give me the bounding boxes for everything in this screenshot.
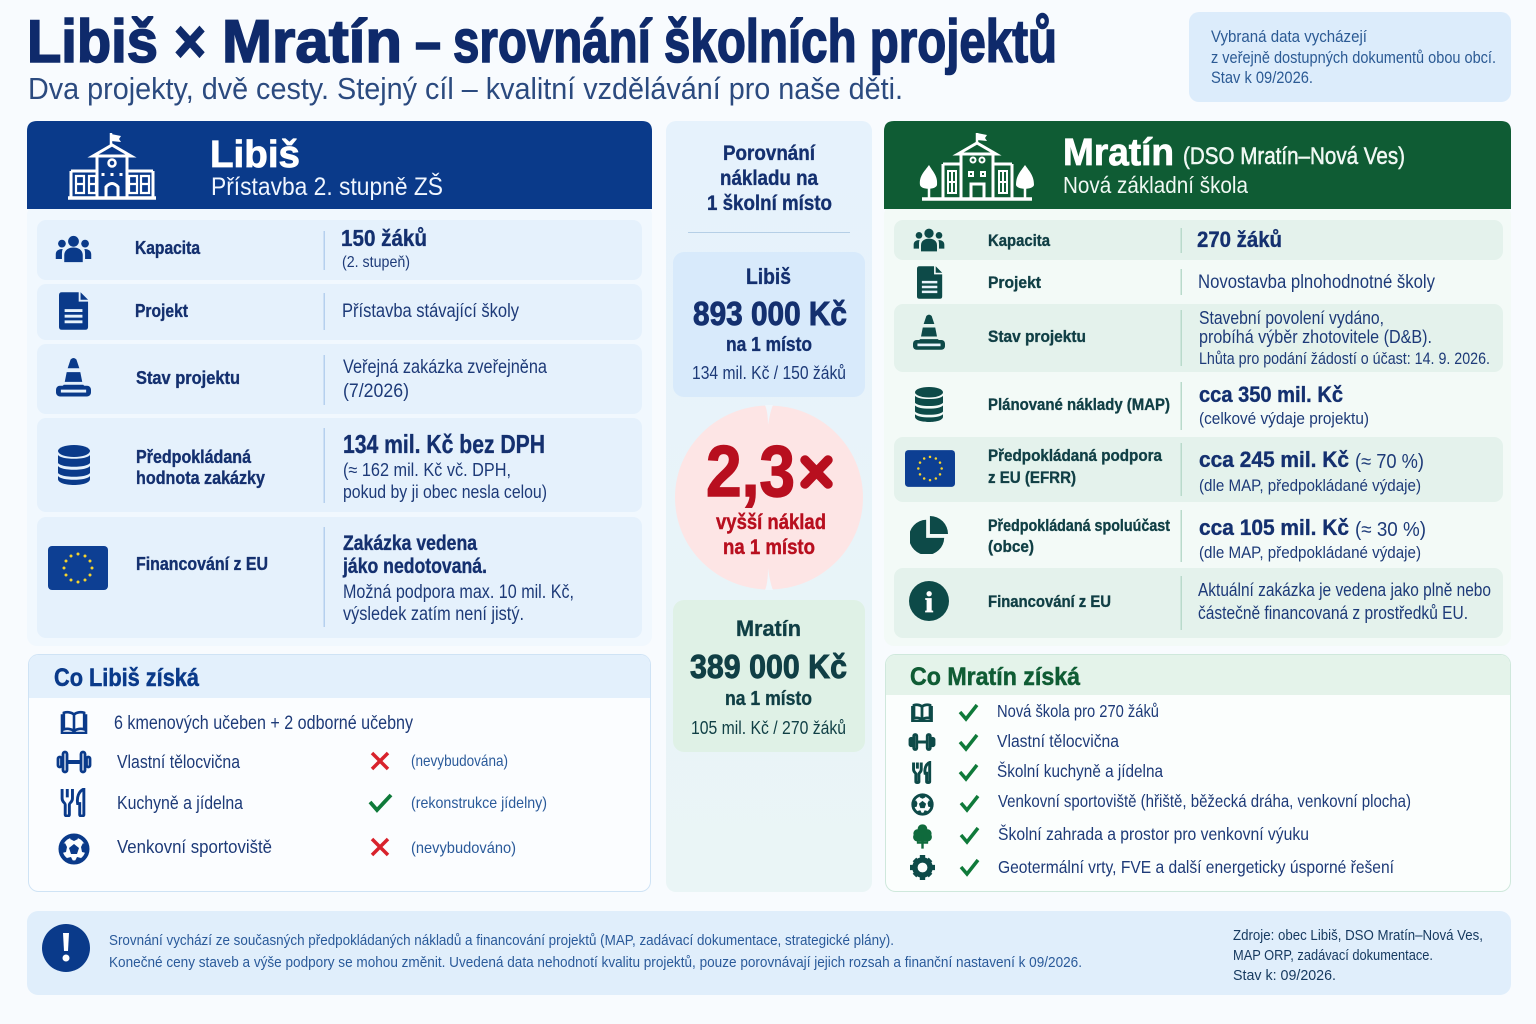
card: Mratín cost: Mratín <box>736 616 801 641</box>
row: Financování z EU: Zakázka vedena <box>343 532 477 555</box>
footer note: Srovnání vychází ze současných předpokládaných nákladů a financování projektů (MAP, zadávací dokumentace, strategické plány). <box>109 932 894 949</box>
panel: Co Libiš získá <box>28 654 650 892</box>
Libiš header <box>27 121 652 209</box>
item: kuchyně <box>914 760 1163 782</box>
comparison heading <box>707 142 832 215</box>
row: Kapacita: Kapacita <box>988 231 1050 250</box>
row: Projekt: Projekt <box>135 301 188 321</box>
card: Libiš cost: na 1 místo <box>726 334 812 356</box>
icon: school with trees <box>920 133 1034 199</box>
item: tělocvična: Vlastní tělocvična <box>117 752 241 772</box>
Mratín header <box>884 121 1511 209</box>
item: kuchyně: (rekonstrukce jídelny) <box>411 795 547 812</box>
title: – <box>415 8 441 75</box>
row: Předpokládaná podpora: (≈ 70 %) <box>1355 451 1424 473</box>
row: Kapacita <box>37 220 642 280</box>
row: Plánované náklady <box>915 382 1369 430</box>
item: učebny: 6 kmenových učeben + 2 odborné učebny <box>114 713 413 734</box>
item: kuchyně: Kuchyně a jídelna <box>117 793 244 813</box>
row: Předpokládaná hodnota zakázky: hodnota zakázky <box>136 468 265 488</box>
panel: Co Libiš získá: Co Libiš získá <box>54 664 199 692</box>
row: Stav projektu: probíhá výběr zhotovitele (D&B). <box>1199 327 1432 347</box>
comparison heading: 1 školní místo <box>707 192 832 215</box>
row: Financování z EU: Financování z EU <box>988 592 1111 611</box>
callout: 2,3×: vyšší náklad <box>716 511 826 534</box>
row: Stav projektu <box>37 344 642 414</box>
row: Stav projektu: (7/2026) <box>343 381 409 402</box>
Libiš header: Přístavba 2. stupně ZŠ <box>211 172 443 201</box>
card: Mratín cost: na 1 místo <box>725 688 812 710</box>
Mratín header: Mratín <box>1063 132 1174 174</box>
item: sportoviště <box>60 835 516 863</box>
item: energie: Geotermální vrty, FVE a další energeticky úsporné řešení <box>998 857 1394 877</box>
item: energie <box>910 855 1394 880</box>
item: tělocvična <box>910 731 1119 751</box>
card: Mratín cost: 105 mil. Kč / 270 žáků <box>691 718 846 738</box>
item: tělocvična: Vlastní tělocvična <box>997 731 1119 751</box>
row: Stav projektu: Stav projektu <box>988 327 1086 346</box>
card: Libiš cost: 134 mil. Kč / 150 žáků <box>692 363 846 383</box>
row: Předpokládaná podpora: (dle MAP, předpokládané výdaje) <box>1199 476 1421 495</box>
row: Financování z EU: Možná podpora max. 10 mil. Kč, <box>343 582 574 603</box>
footer note: Zdroje: obec Libiš, DSO Mratín–Nová Ves, <box>1233 927 1483 944</box>
footer note <box>27 911 1511 995</box>
row: Financování z EU: i <box>925 586 933 619</box>
title <box>27 8 1057 75</box>
row: Předpokládaná spoluúčast: (dle MAP, předpokládané výdaje) <box>1199 543 1421 562</box>
row: Stav projektu: Lhůta pro podání žádostí o účast: 14. 9. 2026. <box>1199 349 1490 368</box>
row: Financování z EU: Financování z EU <box>136 554 268 574</box>
row: Projekt <box>37 284 642 340</box>
card: Libiš cost <box>673 252 865 397</box>
item: nová škola: Nová škola pro 270 žáků <box>997 701 1159 721</box>
row: Předpokládaná podpora <box>894 437 1503 502</box>
item: tělocvična <box>58 752 508 772</box>
footer note: MAP ORP, zadávací dokumentace. <box>1233 947 1433 964</box>
card: Mratín cost: 389 000 Kč <box>690 648 847 685</box>
row: Financování z EU: jáko nedotovaná. <box>342 555 487 578</box>
panel: Co Mratín získá <box>886 654 1510 892</box>
Mratín header: (DSO Mratín–Nová Ves) <box>1183 143 1405 170</box>
row: Kapacita <box>894 220 1503 260</box>
item: kuchyně: Školní kuchyně a jídelna <box>997 760 1163 781</box>
row: Plánované náklady: Plánované náklady (MAP) <box>988 395 1170 414</box>
item: sportoviště: (nevybudováno) <box>411 840 516 857</box>
panel: cost comparison <box>666 121 872 892</box>
row: Předpokládaná hodnota zakázky: (≈ 162 mil. Kč vč. DPH, <box>343 460 511 480</box>
comparison heading: Porovnání <box>723 142 816 165</box>
row: Stav projektu <box>894 304 1503 372</box>
note: data source <box>1189 12 1511 102</box>
item: nová škola <box>912 701 1159 721</box>
row: Projekt: Novostavba plnohodnotné školy <box>1198 272 1435 293</box>
row: Kapacita: 270 žáků <box>1197 227 1282 252</box>
row: Předpokládaná hodnota zakázky <box>37 418 642 512</box>
note: data source: z veřejně dostupných dokumentů obou obcí. <box>1211 48 1496 67</box>
callout: 2,3×: 2,3 <box>706 432 795 512</box>
item: tělocvična: (nevybudována) <box>411 753 508 770</box>
row: Předpokládaná podpora: cca 245 mil. Kč <box>1199 447 1349 472</box>
icon: alert <box>42 924 90 972</box>
row: Předpokládaná spoluúčast: (≈ 30 %) <box>1355 519 1426 541</box>
Libiš header: Libiš <box>210 134 300 176</box>
row: Předpokládaná spoluúčast <box>909 510 1426 562</box>
callout: 2,3× <box>675 405 863 590</box>
callout: 2,3×: na 1 místo <box>723 536 815 559</box>
item: zahrada: Školní zahrada a prostor pro venkovní výuku <box>998 823 1309 844</box>
item: sportoviště: Venkovní sportoviště <box>117 837 272 857</box>
title: srovnání školních projektů <box>453 8 1057 75</box>
row: Stav projektu: Stav projektu <box>136 368 240 388</box>
row: Předpokládaná hodnota zakázky: 134 mil. Kč bez DPH <box>343 429 545 459</box>
card: Libiš cost: 893 000 Kč <box>693 295 847 332</box>
row: Stav projektu: Veřejná zakázka zveřejněna <box>343 357 547 378</box>
panel: Libiš <box>27 121 652 646</box>
row: Financování z EU: částečně financovaná z prostředků EU. <box>1198 603 1468 623</box>
row: Plánované náklady: (celkové výdaje projektu) <box>1199 409 1369 428</box>
footer note: Stav k: 09/2026. <box>1233 967 1336 984</box>
row: Předpokládaná podpora: Předpokládaná podpora <box>988 446 1162 465</box>
row: Projekt: Přístavba stávající školy <box>342 301 519 322</box>
Mratín header: Nová základní škola <box>1063 172 1248 198</box>
card: Mratín cost <box>673 600 865 752</box>
panel: Co Mratín získá: Co Mratín získá <box>910 663 1080 691</box>
row: Kapacita: (2. stupeň) <box>342 254 410 271</box>
row: Předpokládaná podpora: z EU (EFRR) <box>988 468 1076 487</box>
title: Mratín <box>222 8 402 75</box>
row: Financování z EU <box>37 517 642 638</box>
item: sportoviště: Venkovní sportoviště (hřiště, běžecká dráha, venkovní plocha) <box>998 791 1411 811</box>
item: sportoviště <box>913 791 1411 815</box>
row: Kapacita: Kapacita <box>135 238 201 258</box>
row: Kapacita: 150 žáků <box>341 225 427 251</box>
row: Projekt: Projekt <box>988 273 1041 292</box>
title: Libiš <box>27 8 158 75</box>
subtitle: Dva projekty, dvě cesty. Stejný cíl – kvalitní vzdělávání pro naše děti. <box>28 71 903 106</box>
item: kuchyně <box>62 789 547 816</box>
panel: Mratín <box>884 121 1511 646</box>
note: data source: Stav k 09/2026. <box>1211 68 1313 87</box>
row: Předpokládaná hodnota zakázky: Předpokládaná <box>136 447 252 467</box>
footer note: Konečné ceny staveb a výše podpory se mohou změnit. Uvedená data nehodnotí kvalitu projektů, pouze porovnávají jejich rozsah a finanční nastavení k 09/2026. <box>109 954 1082 971</box>
icon: school <box>68 133 156 198</box>
row: Projekt <box>917 266 1435 299</box>
row: Plánované náklady: cca 350 mil. Kč <box>1199 382 1343 407</box>
comparison heading: nákladu na <box>720 167 818 190</box>
row: Předpokládaná spoluúčast: (obce) <box>988 537 1034 556</box>
note: data source: Vybraná data vycházejí <box>1211 27 1367 46</box>
card: Libiš cost: Libiš <box>746 264 791 289</box>
title: × <box>174 8 206 75</box>
row: Financování z EU: výsledek zatím není jistý. <box>343 604 524 625</box>
row: Předpokládaná spoluúčast: cca 105 mil. Kč <box>1199 515 1349 540</box>
row: Financování z EU <box>894 568 1503 638</box>
row: Financování z EU: Aktuální zakázka je vedena jako plně nebo <box>1198 580 1491 600</box>
row: Předpokládaná hodnota zakázky: pokud by ji obec nesla celou) <box>343 482 547 502</box>
row: Stav projektu: Stavební povolení vydáno, <box>1199 308 1384 328</box>
row: Předpokládaná spoluúčast: Předpokládaná spoluúčast <box>988 516 1170 535</box>
item: zahrada <box>913 823 1309 849</box>
